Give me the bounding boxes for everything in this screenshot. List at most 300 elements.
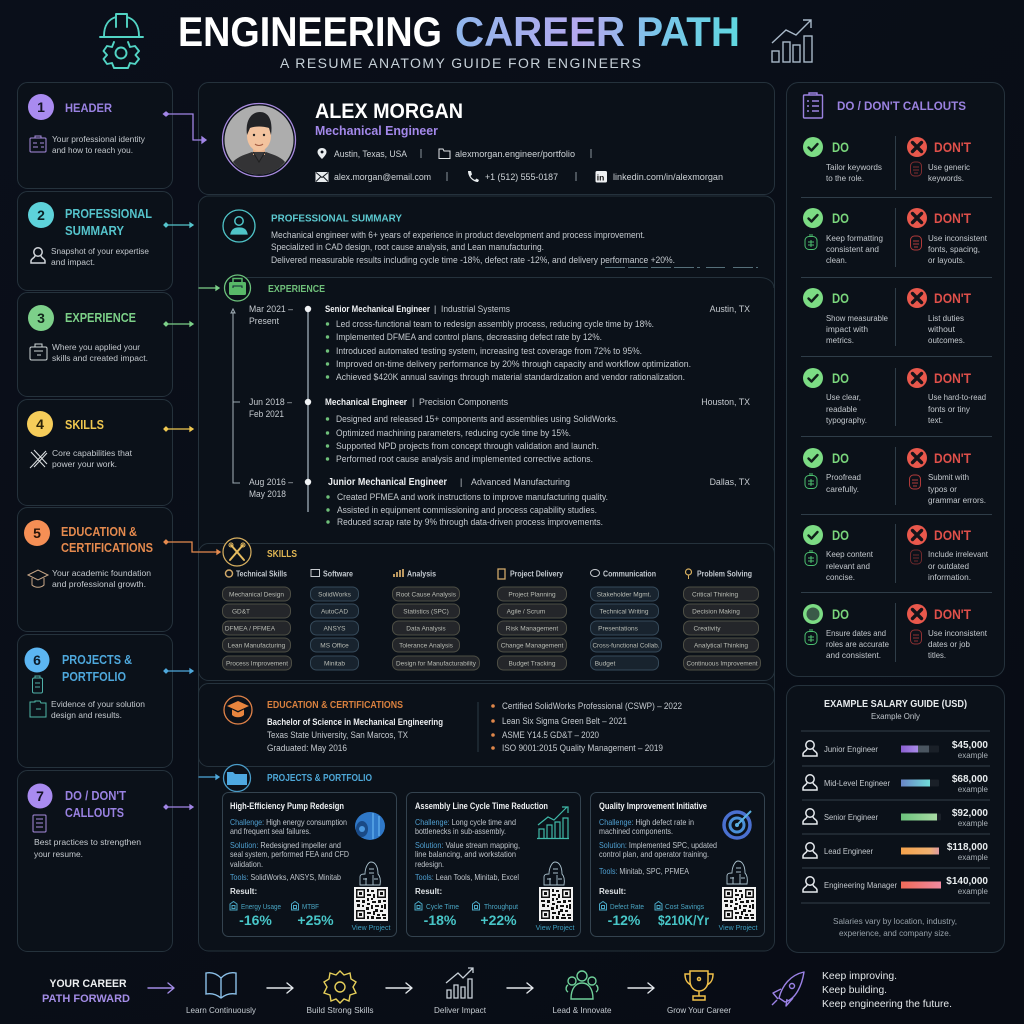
callout row 4: DO — [832, 370, 849, 386]
project card 3: Defect Rate — [610, 902, 644, 911]
icon: pump — [355, 812, 385, 840]
project card 3: Cost Savings — [665, 902, 704, 911]
callout row 6: concise. — [826, 572, 855, 582]
location: Austin, Texas, USA — [334, 149, 408, 159]
callouts heading: DO / DON'T CALLOUTS — [837, 99, 966, 113]
degree: Texas State University, San Marcos, TX — [267, 730, 408, 740]
project card 2: -18% — [424, 912, 457, 928]
salary row junior: Junior Engineer — [824, 744, 878, 754]
skill column: problem solving: Analytical Thinking — [694, 642, 748, 650]
step: lead and innovate: Lead & Innovate — [552, 1005, 612, 1015]
number badge 5: 5 — [33, 525, 41, 541]
icon: helmet with gear — [100, 14, 143, 68]
degree: Bachelor of Science in Mechanical Engineering — [267, 717, 443, 727]
step description: and impact. — [51, 257, 95, 267]
icon: graduation cap — [28, 570, 48, 587]
skill column: project delivery — [498, 569, 566, 670]
step description — [52, 342, 148, 363]
candidate role: Mechanical Engineer — [315, 124, 438, 138]
step description: power your work. — [52, 459, 117, 469]
step heading — [61, 525, 153, 555]
salary row junior — [803, 740, 989, 760]
certifications: Lean Six Sigma Green Belt – 2021 — [502, 716, 627, 726]
panel: left step 3 experience — [18, 292, 172, 396]
icon: linkedin — [596, 171, 607, 182]
step description: Evidence of your solution — [51, 699, 145, 709]
avatar — [222, 104, 296, 176]
phone: +1 (512) 555-0187 — [485, 172, 558, 182]
salary row mid-level: $68,000 — [952, 774, 988, 785]
project card 3: Challenge: High defect rate in — [599, 818, 694, 827]
project card 2 — [406, 792, 580, 936]
callout row 6: Include irrelevant — [928, 549, 989, 559]
callout row 5: Proofread — [826, 472, 861, 482]
portfolio: alexmorgan.engineer/portfolio — [455, 149, 575, 159]
job 2: Performed root cause analysis and implemented corrective actions. — [336, 454, 593, 464]
job 2: Jun 2018 – — [249, 397, 292, 407]
project card 1: View Project — [352, 925, 390, 932]
project card 3: Result: — [599, 887, 626, 896]
project card 1 — [222, 792, 396, 936]
job 1 — [249, 304, 750, 382]
job 1: Led cross-functional team to redesign assembly process, reducing cycle time by 18%. — [336, 319, 654, 329]
step description: Core capabilities that — [52, 448, 133, 458]
project card 1: and frequent seal failures. — [230, 827, 311, 836]
skill column: software — [310, 570, 358, 670]
icon: linkedin: in — [597, 172, 604, 182]
number badge 1 — [28, 94, 54, 120]
skill column: project delivery: Project Planning — [508, 592, 556, 598]
section heading: SKILLS — [267, 549, 297, 560]
step heading: CERTIFICATIONS — [61, 541, 153, 555]
project card 2: redesign. — [415, 860, 444, 869]
callout row 2: or layouts. — [928, 255, 965, 265]
callout row 3: DON'T — [934, 290, 971, 306]
callout row 3: without — [927, 324, 956, 334]
skill column: analysis — [392, 569, 480, 670]
number badge 1: 1 — [37, 99, 45, 115]
step description: Snapshot of your expertise — [51, 246, 149, 256]
salary row manager — [803, 876, 989, 896]
project card 3: Solution: Implemented SPC, updated — [599, 841, 717, 850]
step heading: CALLOUTS — [65, 806, 124, 820]
panel: left step 1 header — [18, 82, 172, 188]
callout row 1: DON'T — [934, 139, 971, 155]
salary row senior: example — [958, 819, 989, 828]
job 3 — [249, 477, 750, 527]
project card 1: validation. — [230, 860, 263, 869]
project card 1: Result: — [230, 887, 257, 896]
skill column: project delivery: Budget Tracking — [509, 660, 556, 668]
summary text: Delivered measurable results including cycle time -18%, defect rate -12%, and delivery performance +20%. — [271, 255, 675, 265]
skill column: problem solving: Continuous Improvement — [686, 660, 758, 668]
panel: professional summary — [223, 210, 758, 268]
callout row 3: impact with — [826, 324, 868, 334]
salary note: Salaries vary by location, industry, — [833, 916, 957, 926]
step description — [34, 837, 141, 859]
number badge 5 — [24, 520, 50, 546]
skill column: project delivery: Risk Management — [506, 626, 558, 632]
callout row 3: DO — [832, 290, 849, 306]
callout row 2 — [803, 208, 988, 265]
skill column: software: Software — [323, 570, 353, 578]
panel: left step 6 projects — [18, 634, 172, 768]
callout row 3: List duties — [928, 313, 964, 323]
panel: education and certifications — [198, 684, 774, 766]
panel: left step 4 skills — [18, 400, 172, 506]
callout row 5: Submit with — [928, 472, 969, 482]
skill column: software: Minitab — [324, 660, 345, 668]
number badge 6 — [24, 648, 50, 672]
callout row 7: and consistent. — [826, 650, 881, 660]
job 1: Mar 2021 – — [249, 304, 293, 314]
salary row mid-level: example — [958, 785, 989, 794]
salary row manager: $140,000 — [946, 876, 988, 887]
skill column: software: SolidWorks — [318, 592, 352, 598]
section heading: EXPERIENCE — [268, 284, 325, 295]
callout row 7 — [803, 604, 988, 660]
panel: left step 7 callouts — [18, 770, 172, 952]
callout row 4: text. — [928, 415, 943, 425]
panel: salary guide — [786, 686, 1004, 952]
project card 3: machined components. — [599, 827, 673, 836]
job 1: | — [434, 304, 436, 314]
callout row 2: clean. — [826, 255, 847, 265]
number badge 6: 6 — [33, 652, 41, 668]
number badge 4 — [27, 411, 53, 437]
skill column: problem solving: Problem Solving — [697, 570, 752, 578]
project card 3: control plan, and operator training. — [599, 850, 709, 859]
section heading: PROFESSIONAL SUMMARY — [271, 212, 402, 224]
step heading: SUMMARY — [65, 224, 125, 238]
project card 3 — [590, 792, 764, 936]
project card 1: High-Efficiency Pump Redesign — [230, 801, 344, 811]
job 1: Improved on-time delivery performance by 20% through capacity and workflow optimization. — [336, 359, 691, 369]
project card 2: bottlenecks in sub-assembly. — [415, 827, 506, 836]
step heading: PROJECTS & — [62, 653, 132, 667]
callout row 2: consistent and — [826, 244, 879, 254]
number badge 3 — [28, 305, 54, 331]
icon: folder — [439, 149, 450, 158]
callout row 4: typography. — [826, 415, 867, 425]
callout row 7: titles. — [928, 650, 946, 660]
salary heading: Example Only — [871, 711, 921, 721]
panel: left step 2 summary — [18, 192, 172, 290]
project card 2: Solution: Value stream mapping, — [415, 841, 520, 850]
callout row 5: grammar errors. — [928, 495, 986, 505]
number badge 2: 2 — [37, 207, 45, 223]
project card 3: Tools: Minitab, SPC, PFMEA — [599, 867, 689, 876]
project card 2: Assembly Line Cycle Time Reduction — [415, 801, 548, 811]
callout row 7: dates or job — [928, 639, 970, 649]
footer: career path forward — [42, 968, 952, 1015]
project card 2: View Project — [536, 925, 574, 932]
job 2: Supported NPD projects from concept through validation and launch. — [336, 441, 599, 451]
step: learn continuously: Learn Continuously — [186, 1005, 257, 1015]
job 2: | — [412, 397, 414, 407]
icon: folder — [224, 764, 250, 792]
job 3: Reduced scrap rate by 9% through data-driven process improvements. — [337, 517, 603, 527]
callout row 2: fonts, spacing, — [928, 244, 980, 254]
icon: tools — [30, 450, 47, 468]
salary row lead: example — [958, 853, 989, 862]
skill column: technical: DFMEA / PFMEA — [225, 626, 276, 632]
callout row 1 — [803, 137, 971, 183]
certifications: ISO 9001:2015 Quality Management – 2019 — [502, 743, 663, 753]
step heading: SKILLS — [65, 418, 104, 432]
step description — [52, 134, 146, 155]
skill column: project delivery: Project Delivery — [510, 570, 563, 578]
callout row 7: Use inconsistent — [928, 628, 988, 638]
skill column: technical: GD&T — [232, 608, 250, 616]
step: build strong skills: Build Strong Skills — [306, 1005, 374, 1015]
skill column: communication: Presentations — [598, 626, 639, 632]
degree — [267, 717, 443, 753]
step description: Best practices to strengthen — [34, 837, 141, 847]
job 1: Industrial Systems — [441, 304, 511, 314]
closing message: Keep engineering the future. — [822, 999, 952, 1010]
step heading — [65, 207, 152, 238]
step heading: HEADER — [65, 101, 112, 115]
skill column: communication: Budget — [595, 660, 615, 668]
number badge 3: 3 — [37, 310, 45, 326]
section heading: PROJECTS & PORTFOLIO — [267, 773, 372, 784]
callout row 4: Use hard-to-read — [928, 392, 986, 402]
title: CAREER PATH — [455, 8, 740, 55]
step description — [52, 568, 151, 589]
icon: folder — [30, 701, 46, 717]
job 3: | — [460, 477, 462, 487]
project card 1: +25% — [297, 912, 334, 928]
icon: person — [31, 248, 45, 263]
step description: your resume. — [34, 849, 83, 859]
step: learn continuously — [186, 973, 257, 1015]
icon: briefcase — [30, 344, 47, 360]
skill column: communication: Technical Writing — [599, 608, 649, 616]
callout row 4 — [803, 368, 986, 425]
project card 3: Quality Improvement Initiative — [599, 801, 707, 811]
callout row 3: metrics. — [826, 335, 854, 345]
callout row 6: Keep content — [826, 549, 874, 559]
skill column: problem solving: Critical Thinking — [692, 592, 738, 598]
job 1: Present — [249, 316, 280, 326]
step heading: EDUCATION & — [61, 525, 137, 539]
salary row lead: Lead Engineer — [824, 846, 873, 856]
salary row mid-level — [803, 774, 989, 794]
skill column: problem solving: Decision Making — [692, 608, 740, 616]
project card 2: Result: — [415, 887, 442, 896]
skill column: communication: Stakeholder Mgmt. — [597, 592, 651, 598]
job 1: Achieved $420K annual savings through material standardization and vendor rationalization. — [336, 372, 685, 382]
callout row 4: DON'T — [934, 370, 971, 386]
project card 1: Energy Usage — [241, 902, 281, 911]
project card 2: Challenge: Long cycle time and — [415, 818, 516, 827]
callout row 6: DO — [832, 527, 849, 543]
step heading: EXPERIENCE — [65, 311, 136, 325]
connectors: left steps to resume — [164, 112, 220, 809]
skill column: communication: Communication — [603, 570, 656, 578]
skill column: problem solving — [684, 569, 760, 670]
salary note — [833, 916, 957, 938]
callout row 7: DON'T — [934, 606, 971, 622]
footer heading: YOUR CAREER — [50, 978, 127, 990]
skill column: project delivery: Change Management — [501, 642, 563, 650]
panel: do and don't callouts — [786, 82, 1004, 676]
salary row manager: Engineering Manager — [824, 880, 897, 890]
step: grow your career — [667, 971, 731, 1015]
step description — [51, 699, 145, 720]
callout row 6: relevant and — [826, 561, 870, 571]
icon: crossed tools — [223, 538, 251, 566]
closing message: Keep improving. — [822, 971, 897, 982]
job 3: Aug 2016 – — [249, 477, 293, 487]
panel: experience — [224, 275, 750, 527]
section heading: EDUCATION & CERTIFICATIONS — [267, 699, 403, 711]
panel: resume body — [198, 82, 774, 951]
salary heading: EXAMPLE SALARY GUIDE (USD) — [824, 698, 967, 710]
callout row 7: DO — [832, 606, 849, 622]
project card 1: Solution: Redesigned impeller and — [230, 841, 341, 850]
job 3: Dallas, TX — [710, 477, 750, 487]
callout row 1: keywords. — [928, 173, 964, 183]
callout row 6: DON'T — [934, 527, 971, 543]
callout row 5: typos or — [928, 484, 957, 494]
callout row 2: DO — [832, 210, 849, 226]
skill column: problem solving: Creativity — [693, 626, 721, 632]
job 3: Advanced Manufacturing — [471, 477, 570, 487]
step description — [52, 448, 133, 469]
skill column: analysis: Data Analysis — [406, 626, 446, 632]
icon: summary person — [223, 210, 255, 242]
linkedin: linkedin.com/in/alexmorgan — [613, 172, 723, 182]
callout row 2: Use inconsistent — [928, 233, 988, 243]
icon: mail — [316, 172, 328, 182]
date connector — [231, 309, 240, 483]
project card 1: Tools: SolidWorks, ANSYS, Minitab — [230, 873, 341, 882]
callout row 1: Use generic — [928, 162, 971, 172]
project card 2: Tools: Lean Tools, Minitab, Excel — [415, 873, 519, 882]
salary heading — [824, 698, 967, 721]
step heading: PORTFOLIO — [62, 670, 126, 684]
project card 3: -12% — [608, 912, 641, 928]
certifications — [491, 701, 682, 753]
callout row 3: outcomes. — [928, 335, 965, 345]
step heading — [65, 789, 126, 820]
timeline — [305, 306, 311, 512]
panel: resume header — [198, 82, 774, 194]
skill column: software: AutoCAD — [321, 608, 348, 616]
callout row 4: fonts or tiny — [928, 404, 971, 414]
callout row 7: Ensure dates and — [826, 628, 886, 638]
project card 3: View Project — [719, 925, 757, 932]
salary row senior: Senior Engineer — [824, 812, 878, 822]
title — [178, 8, 740, 55]
candidate name: ALEX MORGAN — [315, 99, 463, 123]
salary row senior: $92,000 — [952, 808, 988, 819]
icon: clipboard — [804, 93, 822, 118]
icon: growth bars — [537, 807, 569, 838]
skill column: software: ANSYS — [323, 626, 346, 632]
certifications: Certified SolidWorks Professional (CSWP) – 2022 — [502, 701, 682, 711]
job 3: Assisted in equipment commissioning and process capability studies. — [337, 505, 597, 515]
salary row mid-level: Mid-Level Engineer — [824, 778, 890, 788]
salary row lead: $118,000 — [947, 842, 988, 853]
callout row 4: readable — [826, 404, 857, 414]
step description: and how to reach you. — [52, 145, 133, 155]
job 2 — [249, 397, 750, 464]
skill column: communication — [590, 570, 662, 670]
project card 3: $210K/Yr — [658, 912, 709, 928]
skill column: software: MS Office — [320, 642, 349, 650]
job 3: May 2018 — [249, 489, 286, 499]
arrows — [148, 983, 654, 993]
step heading: DO / DON'T — [65, 789, 126, 803]
project card 1: seal system, performed FEA and CFD — [230, 850, 349, 859]
icon: graduation cap — [224, 696, 252, 724]
skill column: technical: Technical Skills — [236, 570, 287, 578]
callout row 4: Use clear, — [826, 392, 861, 402]
callout row 5 — [803, 448, 986, 505]
project card 2: Cycle Time — [426, 902, 459, 911]
step: deliver impact — [434, 968, 487, 1015]
footer heading: PATH FORWARD — [42, 993, 130, 1005]
project card 2: Throughput — [484, 902, 519, 911]
callout row 6 — [803, 525, 989, 582]
closing message: Keep building. — [822, 985, 887, 996]
job 1: Introduced automated testing system, increasing test coverage from 72% to 95%. — [336, 346, 642, 356]
project card 1: MTBF — [302, 902, 319, 911]
skill column: analysis: Analysis — [407, 570, 436, 578]
glitch border accent — [605, 266, 758, 268]
callout row 2: DON'T — [934, 210, 971, 226]
salary row senior — [803, 808, 989, 828]
salary row junior: example — [958, 751, 989, 760]
skill column: project delivery: Agile / Scrum — [507, 608, 545, 616]
job 2: Houston, TX — [701, 397, 750, 407]
step description — [51, 246, 149, 267]
email: alex.morgan@email.com — [334, 172, 431, 182]
title: ENGINEERING — [178, 8, 442, 55]
job 2: Mechanical Engineer — [325, 397, 407, 407]
skill column: analysis: Tolerance Analysis — [399, 642, 454, 650]
job 1: Senior Mechanical Engineer — [325, 304, 430, 314]
skill column: technical — [222, 570, 292, 670]
callout row 1: DO — [832, 139, 849, 155]
step: grow your career: Grow Your Career — [667, 1005, 731, 1015]
callout row 6: or outdated — [928, 561, 969, 571]
callout row 3: Show measurable — [826, 313, 888, 323]
step: lead and innovate — [552, 971, 612, 1015]
step description: Your professional identity — [52, 134, 146, 144]
step description: skills and created impact. — [52, 353, 148, 363]
subtitle: A RESUME ANATOMY GUIDE FOR ENGINEERS — [280, 55, 641, 71]
certifications: ASME Y14.5 GD&T – 2020 — [502, 730, 599, 740]
separators — [421, 149, 591, 181]
job 1: Austin, TX — [710, 304, 750, 314]
callout row 1: Tailor keywords — [826, 162, 882, 172]
callout row 1: to the role. — [826, 173, 864, 183]
skill column: technical: Mechanical Design — [229, 592, 284, 598]
project card 2: +22% — [480, 912, 517, 928]
skill column: analysis: Design for Manufacturability — [396, 660, 477, 668]
panel: skills — [198, 538, 774, 680]
icon: phone — [468, 171, 479, 182]
callout row 7: roles are accurate — [826, 639, 889, 649]
job 2: Optimized machining parameters, reducing cycle time by 15%. — [336, 428, 571, 438]
icon: checklist — [33, 815, 46, 832]
step: deliver impact: Deliver Impact — [434, 1005, 487, 1015]
project card 1: Challenge: High energy consumption — [230, 818, 347, 827]
